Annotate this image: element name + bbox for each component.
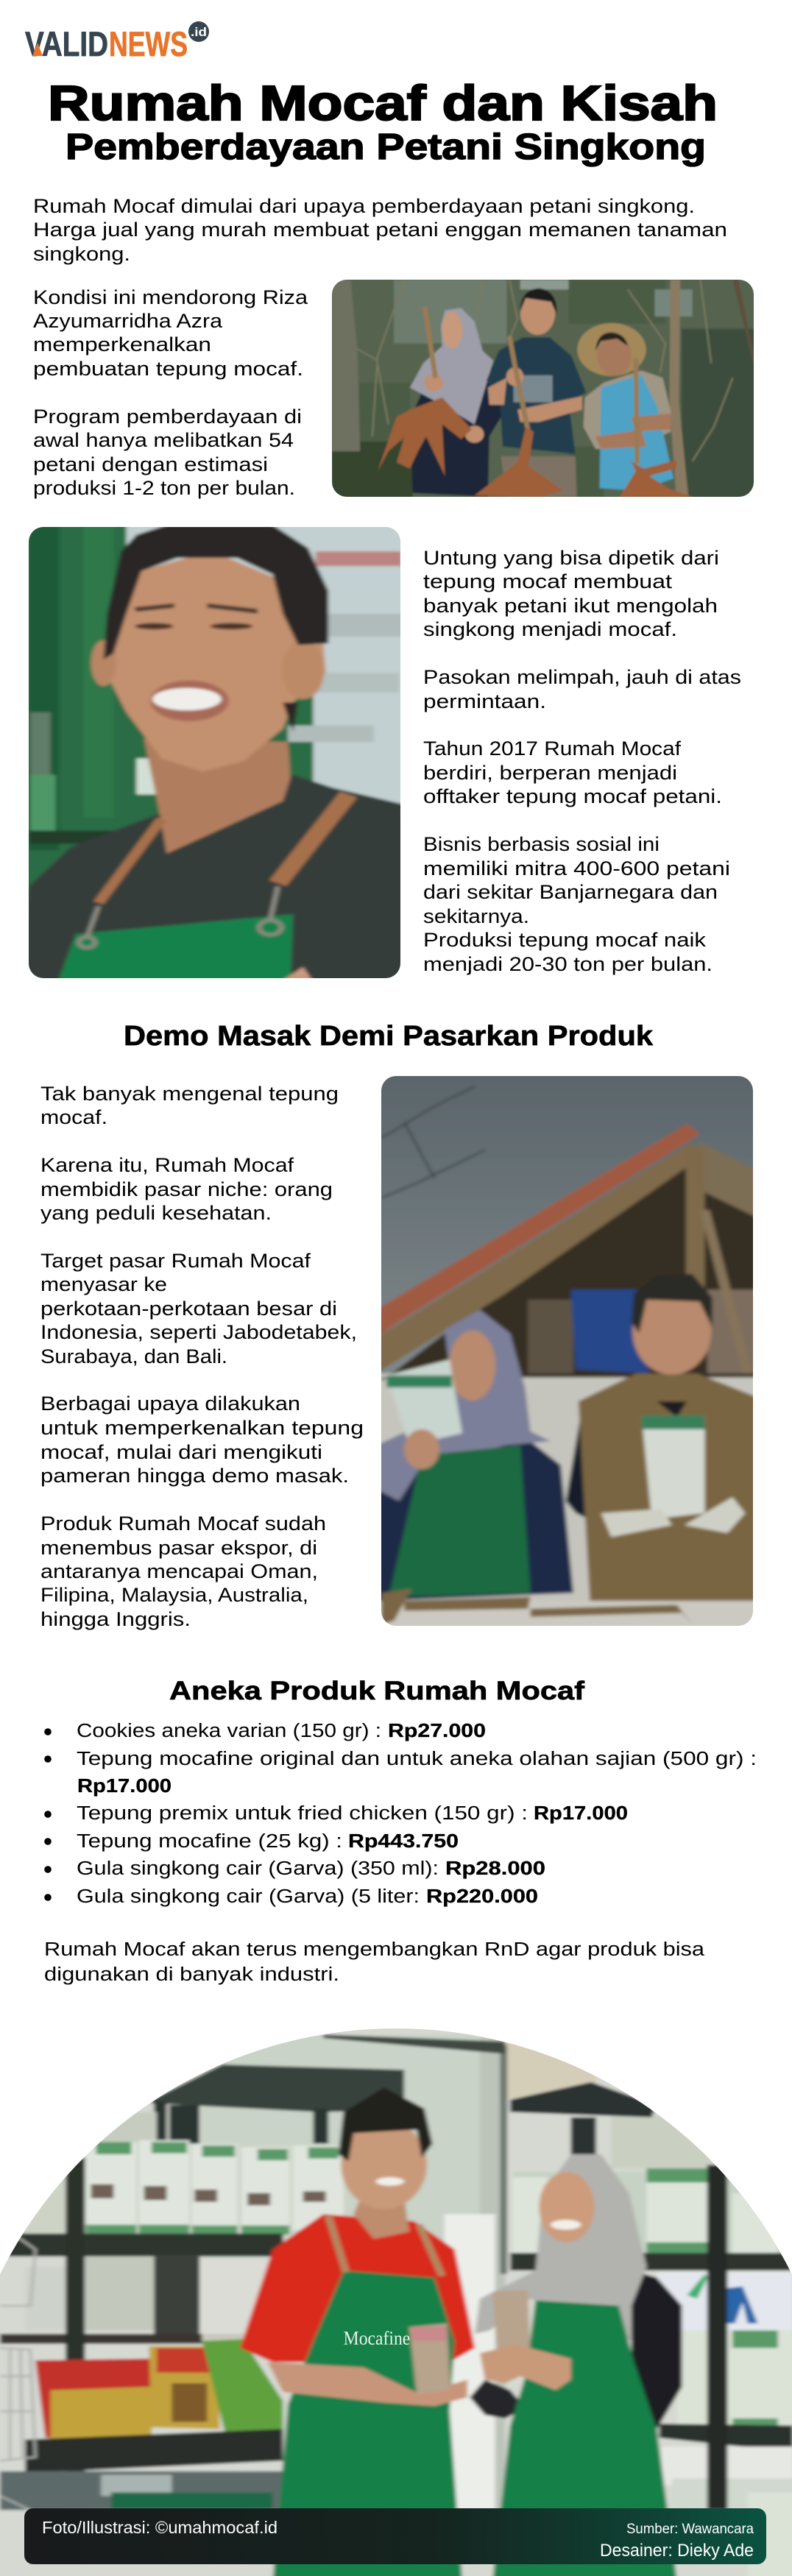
text block: Demo masak: menembus pasar ekspor, di: [40, 1537, 317, 1559]
left shelf: [152, 2064, 404, 2112]
text block: Untung dan pasokan: offtaker tepung mocaf petani.: [423, 785, 722, 807]
list: products and prices: Rp17.000: [77, 1774, 172, 1797]
basket: [0, 2235, 35, 2510]
mouth: [150, 681, 229, 721]
center column: [480, 2038, 505, 2531]
text block: Demo masak: Surabaya, dan Bali.: [40, 1345, 227, 1367]
text block: Demo masak: Karena itu, Rumah Mocaf: [40, 1154, 294, 1176]
text block: Untung dan pasokan: Produksi tepung mocaf naik: [423, 929, 707, 951]
logo: Validnews.id: VALID: [25, 24, 108, 63]
text block: closing: Rumah Mocaf akan terus mengembangkan RnD agar produk bisa: [44, 1939, 705, 1960]
text block: Kondisi dan program: awal hanya melibatkan 54: [33, 429, 294, 451]
title: Rumah Mocaf dan Kisah: [48, 76, 718, 131]
apron logo: Mocafine: [344, 2327, 410, 2349]
text block: intro: Harga jual yang murah membuat petani enggan memanen tanaman: [33, 219, 727, 241]
woman: [627, 2273, 685, 2430]
list: products and prices: Rp28.000: [445, 1857, 545, 1879]
text block: Demo masak: Target pasar Rumah Mocaf: [40, 1250, 311, 1272]
list: products and prices: Rp220.000: [426, 1885, 538, 1907]
right shelf: [510, 2082, 657, 2117]
hair: [104, 525, 328, 659]
heading: Aneka Produk: Aneka Produk Rumah Mocaf: [169, 1677, 584, 1705]
shirt: [20, 775, 404, 982]
text block: Kondisi dan program: Azyumarridha Azra: [33, 310, 222, 332]
text block: Demo masak: Filipina, Malaysia, Australia,: [40, 1584, 308, 1606]
list: products and prices: Rp17.000: [534, 1802, 628, 1824]
text block: Untung dan pasokan: memiliki mitra 400-600 petani: [423, 857, 730, 880]
text block: Demo masak: pameran hingga demo masak.: [40, 1465, 349, 1487]
list: products and prices: Gula singkong cair (Garva) (350 ml):: [77, 1858, 439, 1879]
text block: Demo masak: membidik pasar niche: orang: [40, 1178, 333, 1200]
text block: Untung dan pasokan: Untung yang bisa dipetik dari: [423, 547, 719, 569]
text block: Demo masak: mocaf, mulai dari mengikuti: [40, 1441, 322, 1463]
text block: Kondisi dan program: memperkenalkan: [33, 333, 211, 355]
text block: intro: singkong.: [33, 243, 130, 265]
face: [106, 551, 326, 771]
text block: Demo masak: hingga Inggris.: [40, 1608, 191, 1630]
text block: intro: Rumah Mocaf dimulai dari upaya pemberdayaan petani singkong.: [33, 195, 695, 217]
text block: Kondisi dan program: Program pemberdayaan di: [33, 406, 302, 428]
text block: Kondisi dan program: pembuatan tepung mocaf.: [33, 358, 303, 380]
footer bar: credits: Sumber: Wawancara: [626, 2522, 754, 2537]
photo: two founders holding mocaf packs under a roof: [374, 1070, 766, 1632]
list: products and prices: Tepung mocafine original dan untuk aneka olahan sajian (500 gr) :: [77, 1749, 757, 1769]
text block: Demo masak: perkotaan-perkotaan besar di: [40, 1298, 337, 1320]
apron: [58, 914, 293, 982]
text block: Demo masak: yang peduli kesehatan.: [40, 1202, 272, 1224]
logo: Validnews.id: [25, 21, 209, 63]
list: products and prices: Cookies aneka varian (150 gr) :: [77, 1721, 381, 1741]
title: [48, 76, 718, 167]
text block: Untung dan pasokan: dari sekitar Banjarnegara dan: [423, 881, 718, 903]
text block: Demo masak: antaranya mencapai Oman,: [40, 1560, 318, 1582]
list: products and prices: Rp27.000: [388, 1719, 486, 1741]
text block: Kondisi dan program: Kondisi ini mendorong Riza: [33, 286, 308, 308]
text block: Kondisi dan program: produksi 1-2 ton per bulan.: [33, 477, 295, 499]
text block: Demo masak: menyasar ke: [40, 1273, 167, 1295]
text block: Untung dan pasokan: Bisnis berbasis sosial ini: [423, 833, 660, 855]
text block: Demo masak: Tak banyak mengenal tepung: [40, 1083, 339, 1105]
woman: [376, 1437, 573, 1601]
title: Pemberdayaan Petani Singkong: [66, 127, 706, 167]
man: [240, 2214, 475, 2362]
text block: Demo masak: [40, 1083, 364, 1630]
center man: [501, 456, 577, 497]
photo: founders in the product shop: [0, 2024, 792, 2576]
text block: Kondisi dan program: petani dengan estimasi: [33, 453, 268, 475]
text block: Demo masak: Berbagai upaya dilakukan: [40, 1393, 300, 1415]
boxes: [35, 2359, 152, 2438]
text block: Demo masak: Indonesia, seperti Jabodetabek,: [40, 1321, 357, 1343]
neck: [144, 739, 291, 854]
text block: intro: [33, 195, 727, 265]
footer bar: credits: [24, 2508, 766, 2564]
text block: Untung dan pasokan: banyak petani ikut mengolah: [423, 595, 718, 617]
woman: [411, 381, 502, 497]
trays: [381, 1598, 753, 1626]
logo: Validnews.id: NEWS: [109, 24, 188, 63]
text block: Untung dan pasokan: Pasokan melimpah, jauh di atas: [423, 666, 741, 688]
text block: Untung dan pasokan: berdiri, berperan menjadi: [423, 762, 677, 784]
text block: Untung dan pasokan: tepung mocaf membuat: [423, 570, 673, 592]
text block: Untung dan pasokan: menjadi 20-30 ton per bulan.: [423, 953, 713, 975]
farmer: [584, 370, 671, 449]
text block: Demo masak: untuk memperkenalkan tepung: [40, 1417, 364, 1439]
footer bar: credits: Foto/Illustrasi: ©umahmocaf.id: [42, 2518, 277, 2537]
text block: Untung dan pasokan: sekitarnya.: [423, 905, 529, 927]
text block: Demo masak: Produk Rumah Mocaf sudah: [40, 1512, 326, 1535]
text block: Untung dan pasokan: singkong menjadi mocaf.: [423, 618, 677, 640]
list: products and prices: Tepung premix untuk fried chicken (150 gr) :: [77, 1803, 528, 1824]
list: products and prices: Tepung mocafine (25 kg) :: [77, 1831, 342, 1852]
text block: closing: digunakan di banyak industri.: [44, 1964, 339, 1985]
list: products and prices: [44, 1719, 757, 1907]
text block: Kondisi dan program: [33, 286, 308, 499]
photo: three farmers holding cassava: [327, 275, 760, 503]
list: products and prices: Gula singkong cair (Garva) (5 liter:: [77, 1886, 420, 1907]
text block: Untung dan pasokan: permintaan.: [423, 690, 546, 712]
stalks and cassava: [425, 307, 637, 464]
list: products and prices: Rp443.750: [348, 1830, 459, 1852]
text block: closing: [44, 1939, 705, 1985]
eyes and brows: [135, 623, 173, 629]
text block: Untung dan pasokan: Tahun 2017 Rumah Mocaf: [423, 737, 682, 760]
man: [562, 1422, 589, 1519]
footer bar: credits: Desainer: Dieky Ade: [600, 2541, 754, 2561]
logo: Validnews.id: .id: [191, 25, 207, 39]
text block: Untung dan pasokan: [423, 547, 741, 975]
photo: smiling man in green apron: [20, 522, 414, 982]
heading: Demo Masak: Demo Masak Demi Pasarkan Produk: [124, 1021, 654, 1052]
text block: Demo masak: mocaf.: [40, 1106, 107, 1128]
